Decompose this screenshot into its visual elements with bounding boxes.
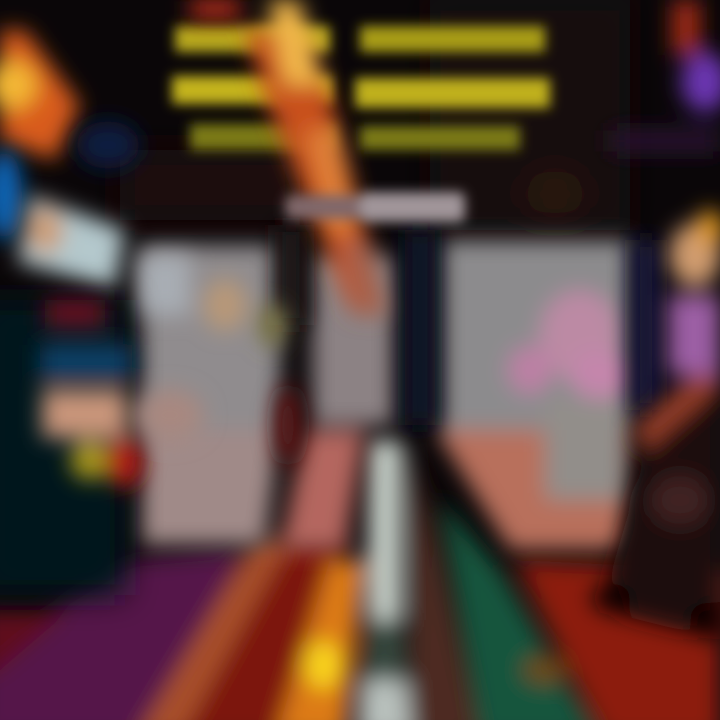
figure details [40, 300, 204, 488]
title text block [172, 26, 550, 150]
icon: blue shapes left [0, 121, 140, 240]
panel: light card row [18, 195, 286, 347]
flame streak [190, 0, 385, 315]
character: right figure [592, 210, 720, 640]
floor: bottom coloured stripes [0, 440, 720, 720]
icon: top-right glow [610, 0, 720, 152]
character: left figure [0, 300, 204, 595]
dark teal body [0, 300, 125, 595]
ceiling tint [120, 0, 630, 230]
subtitle label [285, 192, 465, 222]
central dark column [274, 225, 660, 465]
panel: left grey wall [140, 245, 394, 550]
panel: right grey wall [435, 240, 630, 550]
icon: top-left flame blob [0, 30, 80, 160]
